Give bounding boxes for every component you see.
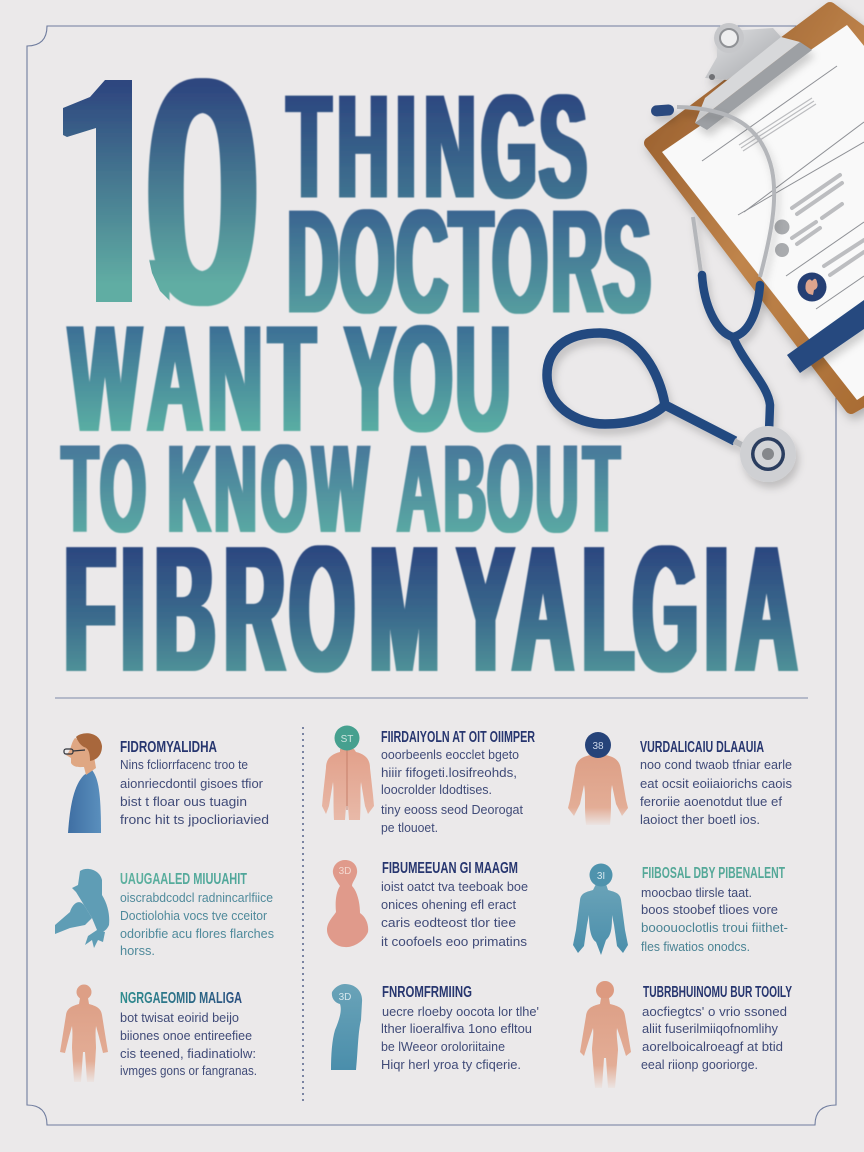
body text: feroriie aoenotdut tlue ef (640, 794, 782, 809)
paper badge (798, 272, 826, 302)
item: column 2 row 3 (331, 984, 539, 1072)
icon: hunched blue figure (55, 869, 109, 948)
item: column 2 row 1 (322, 726, 535, 835)
icon: blue side figure: 3D (339, 992, 351, 1003)
body text: ivmges gons or fangranas. (120, 1063, 257, 1078)
body text: onices ohening efl eract (381, 897, 516, 912)
item: column 3 row 3 (580, 981, 792, 1088)
paper sheet (662, 25, 864, 400)
icon: blue figure: 3I (597, 871, 605, 882)
body text: tiny eooss seod Deorogat (381, 802, 523, 817)
body text: lther lioeralfiva 1ono efltou (381, 1021, 532, 1036)
body text: caris eodteost tlor tiee (381, 915, 516, 930)
body text: loocrolder ldodtises. (381, 782, 492, 797)
navy stem (733, 337, 770, 432)
body text: ooorbeenls eocclet bgeto (381, 747, 519, 762)
body text: aorelboicalroeagf at btid (642, 1039, 783, 1054)
body text: fles fiwatios onodcs. (641, 939, 750, 954)
heading: FNROMFRMIING (382, 984, 472, 1001)
icon: pink blob figure: 3D (339, 866, 351, 877)
icon: back figure with navy head: 38 (592, 741, 604, 752)
body text (120, 890, 274, 958)
heading: TUBRBHUINOMU BUR TOOILY (643, 984, 792, 1001)
item: column 3 row 2 (573, 864, 788, 955)
ear tip (651, 104, 674, 117)
icon: pink blob figure (327, 860, 368, 947)
heading: FIBUMEEUAN GI MAAGM (382, 860, 518, 877)
body text: Doctiolohia vocs tve cceitor (120, 908, 268, 923)
body text: eeal riionp gooriorge. (641, 1057, 758, 1072)
body text: be lWeeor oroloriitaine (381, 1039, 505, 1054)
illustration: stethoscope (547, 104, 796, 482)
body text: noo cond twaob tfniar earle (640, 757, 792, 772)
icon: peach back figure (580, 981, 631, 1088)
body text: Nins fcliorrfacenc troo te (120, 757, 248, 772)
title line: TO KNOW ABOUT: TO KNOW ABOUT (62, 419, 619, 559)
body text: hiiir fifogeti.losifreohds, (381, 765, 517, 780)
body text: cis teened, fiadinatiolw: (120, 1046, 256, 1061)
item: column 2 row 2 (327, 860, 528, 949)
heading: FIIBOSAL DBY PIBENALENT (642, 865, 785, 882)
paper text lines (702, 66, 864, 309)
body text: odoribfie acu flores flarches (120, 926, 274, 941)
body text: eat ocsit eoiiaiorichs caois (640, 776, 792, 791)
title number 10: 10 (46, 11, 262, 371)
paper grey dots (774, 220, 790, 257)
navy loop tube (547, 333, 735, 441)
title line: DOCTORS: DOCTORS (287, 179, 651, 344)
body text (120, 1010, 257, 1078)
navy band (787, 300, 864, 373)
icon: blue side figure (331, 984, 362, 1070)
heading: VURDALICAIU DLAAUIA (640, 739, 764, 756)
body text: fronc hit ts jpoclioriavied (120, 812, 269, 827)
body text: it coofoels eoo primatins (381, 934, 528, 949)
body text (381, 1004, 539, 1072)
body text (120, 757, 269, 827)
metal clip (695, 23, 812, 130)
item: column 1 row 2 (55, 869, 274, 958)
item: column 3 row 1 (568, 732, 792, 827)
title line: THINGS: THINGS (287, 64, 587, 229)
heading: NGRGAEOMID MALIGA (120, 990, 242, 1007)
body text: booouoclotlis troui fiithet- (641, 920, 788, 935)
icon: back figure with teal head: ST (341, 734, 353, 745)
body text (641, 885, 788, 954)
clipboard board (650, 8, 864, 408)
body text: horss. (120, 943, 155, 958)
body text: uecre rloeby oocota lor tlhe' (382, 1004, 539, 1019)
heading: FIDROMYALIDHA (120, 739, 217, 756)
heading: UAUGAALED MIUUAHIT (120, 871, 247, 888)
silver ear tube (677, 107, 774, 277)
paper grey bars (792, 175, 864, 275)
title line: FIBROMYALGIA: FIBROMYALGIA (65, 508, 796, 710)
body text: laoioct ther boetl ios. (640, 812, 760, 827)
body text: Hiqr herl yroa ty cfiqerie. (381, 1057, 521, 1072)
body text: ioist oatct tva teeboak boe (381, 879, 528, 894)
body text (640, 757, 792, 827)
body text: biiones onoe entireefiee (120, 1028, 252, 1043)
body text: boos stoobef tlioes vore (641, 902, 778, 917)
body text: bist t floar ous tuagin (120, 794, 247, 809)
body text: aliit fuserilmiiqofnomlihy (642, 1021, 778, 1036)
title line: WANT YOU: WANT YOU (69, 294, 510, 464)
body text: moocbao tlirsle taat. (641, 885, 752, 900)
item: column 1 row 1 (64, 733, 269, 833)
icon: man in profile (64, 733, 102, 833)
title (59, 77, 799, 674)
body text: pe tlouoet. (381, 820, 438, 835)
chestpiece (734, 426, 796, 482)
icon: peach back figure (60, 984, 108, 1082)
body text (641, 1004, 787, 1072)
body text: oiscrabdcodcl radnincarlfiice (120, 890, 273, 905)
illustration: clipboard (650, 8, 864, 408)
icon: back figure with navy head (568, 732, 628, 825)
icon: back figure with teal head (322, 726, 374, 820)
body text (381, 879, 528, 949)
section divider (55, 697, 808, 699)
navy Y tubes (702, 275, 760, 337)
body text: aocfiegtcs' o vrio ssoned (642, 1004, 787, 1019)
item: column 1 row 3 (60, 984, 257, 1082)
heading: FIIRDAIYOLN AT OIT OIIMPER (381, 729, 535, 746)
body text (381, 747, 523, 835)
body text: aionriecdontil gisoes tfior (120, 776, 264, 791)
icon: blue figure (573, 864, 628, 955)
body text: bot twisat eoirid beijo (120, 1010, 239, 1025)
